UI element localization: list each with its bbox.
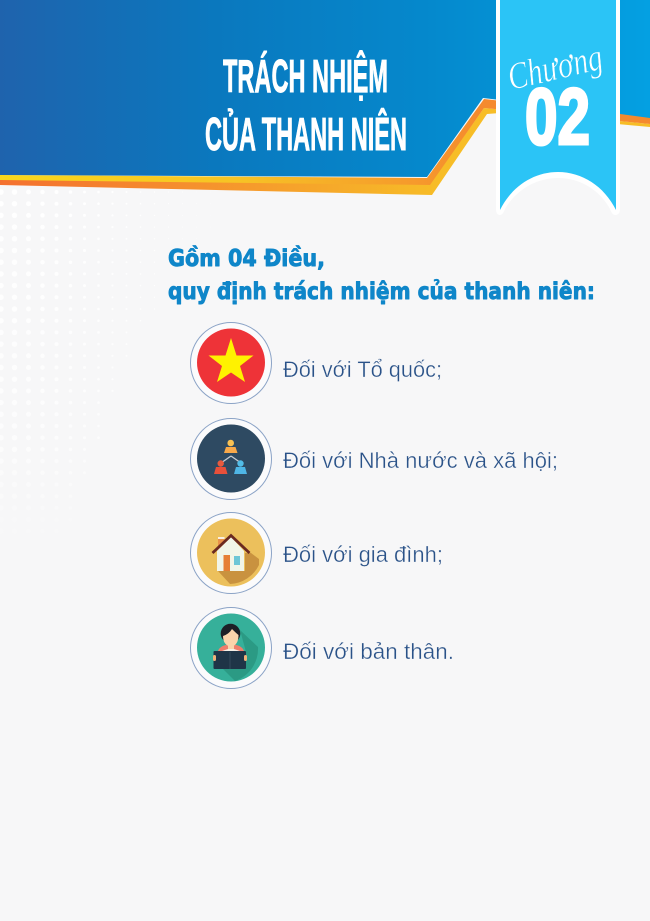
dotted background pattern xyxy=(1,192,210,550)
heading: Gồm 04 Điều, xyxy=(168,245,325,272)
chapter number: 02 xyxy=(525,72,590,161)
list item: Tổ quốc: Đối với Tổ quốc; xyxy=(283,357,442,382)
title: CỦA THANH NIÊN xyxy=(205,108,407,160)
list item: Nhà nước và xã hội: Đối với Nhà nước và xã hội; xyxy=(283,448,558,473)
ribbon shape xyxy=(496,0,620,215)
heading xyxy=(168,245,595,305)
blue band xyxy=(0,0,650,177)
list item: gia đình: Đối với gia đình; xyxy=(283,542,443,567)
title: TRÁCH NHIỆM xyxy=(223,50,388,102)
chapter word: Chương xyxy=(504,36,607,99)
icon: person reading xyxy=(190,608,272,688)
icon: organisation people xyxy=(190,418,272,500)
header banner xyxy=(0,0,650,195)
heading: quy định trách nhiệm của thanh niên: xyxy=(168,279,595,305)
icon: house xyxy=(190,512,272,594)
lower stripe xyxy=(0,108,650,195)
chapter ribbon xyxy=(496,0,620,215)
list item: bản thân: Đối với bản thân. xyxy=(283,639,454,664)
icon: red circle with yellow star xyxy=(190,322,272,404)
title xyxy=(205,50,407,160)
upper stripe xyxy=(0,99,650,185)
